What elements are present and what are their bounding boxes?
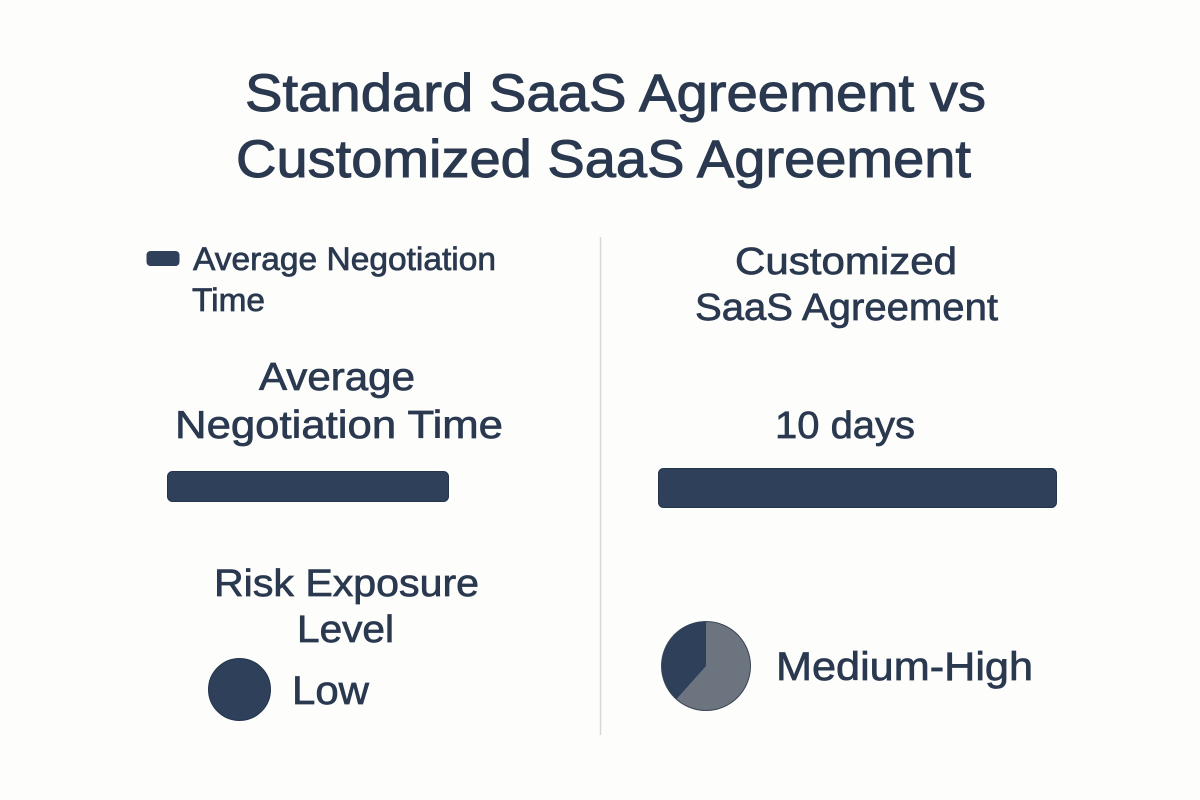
negotiation time value: 10 days [775,405,915,447]
title [236,64,986,189]
heading: average negotiation time: Negotiation Time [175,404,503,447]
legend label: Average Negotiation [193,241,496,277]
title: Customized SaaS Agreement [236,130,971,189]
bar: standard negotiation time [168,472,448,502]
low risk label: Low [292,669,369,713]
pie: medium-high risk [662,622,750,710]
heading: average negotiation time [175,356,503,447]
medium-high risk label: Medium-High [776,645,1033,689]
heading: average negotiation time: Average [259,356,415,399]
heading: customized saas agreement [695,241,998,329]
bar: customized negotiation time [658,468,1056,508]
legend [146,241,496,318]
legend label [192,241,496,318]
heading: customized saas agreement: SaaS Agreement [695,287,998,329]
heading: customized saas agreement: Customized [735,241,957,283]
legend swatch [146,251,180,266]
title: Standard SaaS Agreement vs [245,64,986,123]
panel: standard agreement [146,241,503,720]
legend label: Time [192,282,265,318]
heading: risk exposure level [214,563,479,651]
icon: low risk circle [208,658,270,720]
heading: risk exposure level: Level [297,609,394,651]
panel: customized agreement [658,241,1056,710]
heading: risk exposure level: Risk Exposure [214,563,479,605]
